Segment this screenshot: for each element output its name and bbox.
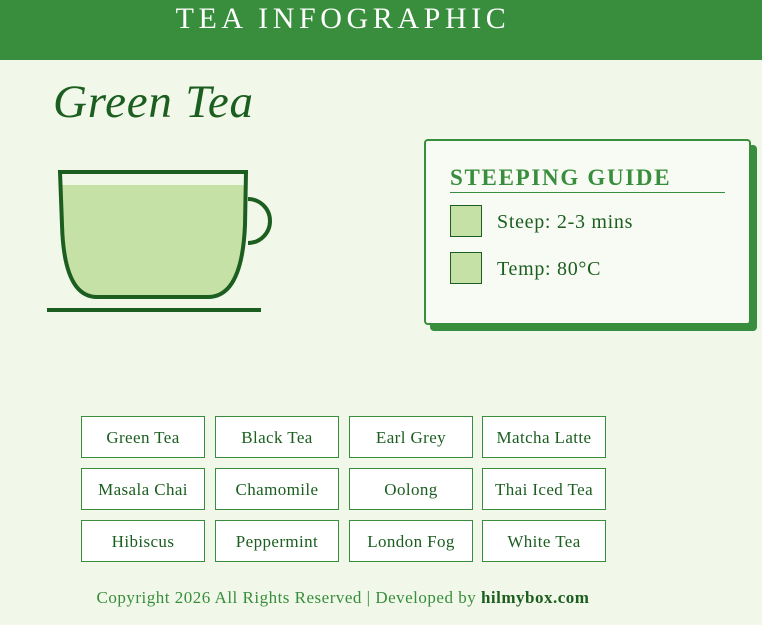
icon: tea cup (47, 170, 272, 312)
tea buttons grid: London Fog (367, 532, 455, 551)
title: TEA INFOGRAPHIC (176, 2, 510, 35)
heading: STEEPING GUIDE (450, 165, 671, 190)
tea buttons grid: Masala Chai (98, 480, 188, 499)
tea buttons grid: Black Tea (241, 428, 313, 447)
tea buttons grid: Earl Grey (376, 428, 446, 447)
tea buttons grid (81, 416, 606, 562)
tea buttons grid: Thai Iced Tea (495, 480, 593, 499)
tea name heading: Green Tea (53, 76, 254, 128)
header bar (0, 0, 762, 60)
footer: Copyright 2026 All Rights Reserved | Developed by hilmybox.com (97, 588, 589, 607)
panel: steeping guide (424, 139, 751, 325)
tea buttons grid: Hibiscus (112, 532, 174, 551)
tea buttons grid: Oolong (384, 480, 438, 499)
item: temperature (450, 252, 601, 284)
tea buttons grid: White Tea (507, 532, 581, 551)
tea buttons grid: Chamomile (236, 480, 318, 499)
tea buttons grid: Peppermint (236, 532, 318, 551)
item: steep time: Steep: 2-3 mins (497, 211, 633, 233)
item: temperature: Temp: 80°C (497, 258, 601, 280)
tea buttons grid: Green Tea (106, 428, 180, 447)
tea buttons grid: Matcha Latte (497, 428, 591, 447)
item: steep time (450, 205, 633, 237)
